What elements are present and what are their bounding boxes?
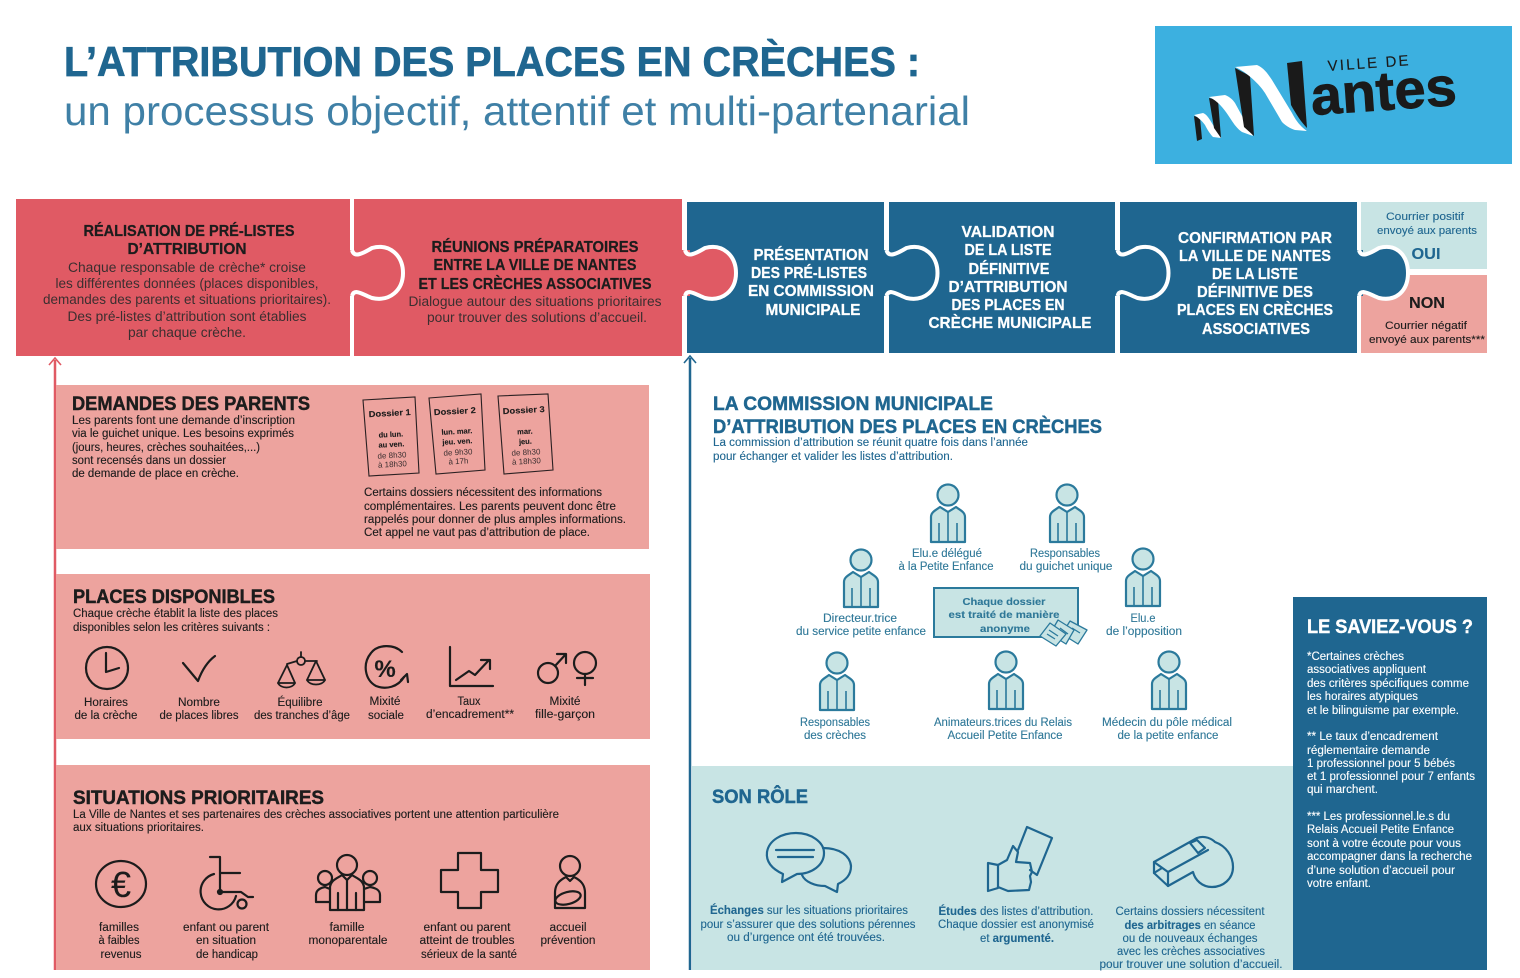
text: réalisation: les différentes données (places disponibles, — [56, 276, 318, 291]
text: footnote 3: accompagner dans la recherche — [1307, 851, 1472, 863]
text: informations complémentaires: rappelés pour donner de plus amples informations. — [364, 514, 626, 526]
heading: réalisation — [84, 221, 295, 258]
labels: critères: Nombre — [178, 697, 220, 709]
text: places disponibles — [73, 608, 278, 634]
labels: situations: famille — [330, 922, 364, 934]
panel: demandes des parents — [56, 385, 649, 549]
labels: situations: enfant ou parent — [424, 922, 511, 934]
person: médecin — [1102, 652, 1232, 742]
heading: validation: DE LA LISTE — [964, 242, 1052, 259]
labels: situations: prévention — [540, 935, 596, 947]
heading: présentation: MUNICIPALE — [766, 302, 861, 319]
callout: dossier anonyme: est traité de manière — [948, 609, 1060, 621]
labels: critères: fille-garçon — [535, 709, 595, 721]
labels: situations: atteint de troubles — [420, 935, 515, 947]
icon: medical cross — [441, 853, 498, 908]
text: échanges: Échanges sur les situations prioritaires — [710, 904, 908, 917]
person: élu opposition: Elu.e — [1130, 613, 1156, 625]
heading: validation — [928, 224, 1092, 332]
heading: confirmation: ASSOCIATIVES — [1202, 321, 1310, 338]
text: footnote 1: les horaires atypiques — [1307, 691, 1418, 703]
dossier 1: du lun. — [378, 429, 403, 440]
text: footnote 3: *** Les professionnel.le.s du — [1307, 811, 1450, 823]
person: élu délégué: Elu.e délégué — [912, 548, 982, 560]
heading: validation: D’ATTRIBUTION — [948, 279, 1068, 296]
labels: critères: de places libres — [160, 710, 239, 722]
text: réunions: pour trouver des solutions d’accueil. — [427, 310, 647, 325]
panel: oui: OUI — [1412, 246, 1440, 263]
dossier 1: au ven. — [378, 439, 405, 450]
text: informations complémentaires: complémentaires. Les parents peuvent donc être — [364, 501, 616, 513]
icon: speech bubbles — [767, 833, 851, 892]
icon: gender symbols — [538, 652, 596, 685]
labels: situations: familles — [99, 922, 139, 934]
icon: whistle — [1154, 837, 1233, 887]
heading: validation: DÉFINITIVE — [968, 259, 1050, 278]
dossier 3: Dossier 3 — [503, 404, 545, 416]
heading: places disponibles: PLACES DISPONIBLES — [73, 587, 275, 608]
dossier 2: de 9h30 — [443, 447, 473, 458]
text: réunions — [408, 294, 662, 325]
person: responsables guichet: Responsables — [1030, 548, 1100, 560]
panel: le saviez-vous — [1293, 597, 1487, 970]
dossier 1: à 18h30 — [378, 459, 408, 470]
heading: confirmation — [1177, 230, 1333, 338]
person: élu opposition: de l’opposition — [1106, 626, 1182, 638]
labels: situations: enfant ou parent — [183, 922, 270, 934]
icon: thumb up with card — [988, 827, 1052, 891]
text: footnote 2: 1 professionnel pour 5 bébés — [1307, 758, 1455, 770]
heading: présentation: PRÉSENTATION — [754, 245, 868, 264]
panel: oui: envoyé aux parents — [1377, 225, 1478, 237]
text: demandes: (jours, heures, crèches souhaitées,...) — [72, 442, 260, 454]
text: demandes: sont recensés dans un dossier — [72, 455, 226, 467]
text: footnote 2 — [1307, 731, 1475, 796]
heading: réunions: ET LES CRÈCHES ASSOCIATIVES — [418, 274, 652, 293]
text: footnote 1: *Certaines crèches — [1307, 651, 1404, 663]
heading: la commission municipale: LA COMMISSION MUNICIPALE — [713, 394, 993, 415]
labels: situations: revenus — [100, 949, 142, 961]
text: informations complémentaires: Certains dossiers nécessitent des informations — [364, 487, 602, 499]
text: études: Chaque dossier est anonymisé — [938, 919, 1094, 931]
heading: situations prioritaires: SITUATIONS PRIORITAIRES — [73, 788, 324, 809]
person: responsables crèches: Responsables — [800, 717, 870, 729]
callout: dossier anonyme: anonyme — [980, 623, 1030, 635]
icon: scales — [278, 652, 325, 688]
panel: non — [1361, 275, 1487, 353]
text: demandes: de demande de place en crèche. — [72, 468, 239, 480]
panel: non: envoyé aux parents*** — [1369, 334, 1486, 346]
panel: validation de la liste — [882, 202, 1115, 353]
labels: critères: Horaires — [84, 697, 128, 709]
text: arbitrages: pour trouver une solution d’accueil. — [1100, 959, 1282, 971]
person: responsables guichet: du guichet unique — [1020, 561, 1112, 573]
heading: validation: CRÈCHE MUNICIPALE — [928, 313, 1092, 332]
text: footnote 2: et 1 professionnel pour 7 enfants — [1307, 771, 1475, 783]
text: situations prioritaires: La Ville de Nantes et ses partenaires des crèches associatives portent une attention particulière — [73, 809, 559, 821]
person: médecin: de la petite enfance — [1118, 730, 1218, 742]
connector arrow: red — [49, 358, 61, 970]
labels: situations: accueil — [550, 922, 586, 934]
panel: réalisation de pré-listes — [16, 199, 350, 356]
panel: places disponibles — [56, 574, 650, 739]
heading: confirmation: DE LA LISTE — [1212, 266, 1298, 283]
text: échanges: ou d’urgence ont été trouvées. — [727, 932, 885, 944]
panel: son rôle — [692, 766, 1293, 971]
heading: validation: VALIDATION — [962, 224, 1054, 241]
heading: réalisation: RÉALISATION DE PRÉ-LISTES — [84, 221, 295, 240]
heading: la commission municipale — [713, 394, 1102, 438]
text: footnote 1: associatives appliquent — [1307, 664, 1427, 676]
text: demandes: Les parents font une demande d’inscription — [72, 415, 295, 427]
text: footnote 1: et le bilinguisme par exemple. — [1307, 705, 1459, 717]
labels: critères: sociale — [368, 710, 404, 722]
text: footnote 2: ** Le taux d’encadrement — [1307, 731, 1439, 743]
panel: oui — [1361, 202, 1487, 269]
heading: réunions: RÉUNIONS PRÉPARATOIRES — [432, 237, 639, 256]
heading: présentation: EN COMMISSION — [748, 283, 874, 300]
person: animateurs: Animateurs.trices du Relais — [934, 717, 1072, 729]
person: animateurs — [934, 652, 1072, 742]
text: arbitrages: ou de nouveaux échanges — [1122, 933, 1258, 945]
labels: critères — [74, 696, 595, 722]
text: réalisation: Des pré-listes d’attribution sont établies — [68, 309, 307, 324]
text: études: Études des listes d’attribution. — [938, 905, 1094, 918]
person: élu opposition — [1106, 548, 1182, 638]
icon: single-parent family — [316, 855, 380, 910]
icon: percent mixité sociale — [366, 646, 408, 688]
panel: réunions préparatoires — [346, 199, 682, 356]
dossier 3: à 18h30 — [512, 456, 542, 467]
labels: situations: sérieux de la santé — [421, 949, 517, 961]
icon: percent mixité sociale: % — [374, 656, 396, 683]
text: échanges: pour s’assurer que des solutions pérennes — [700, 919, 916, 931]
text: réalisation: demandes des parents et situations prioritaires). — [43, 292, 331, 307]
text: échanges — [700, 904, 916, 944]
text: demandes: via le guichet unique. Les besoins exprimés — [72, 428, 294, 440]
icon: check mark — [183, 656, 215, 681]
icon: documents — [1040, 620, 1087, 646]
labels: critères: d’encadrement** — [426, 709, 515, 721]
text: arbitrages — [1100, 906, 1282, 971]
heading: réunions — [418, 237, 652, 293]
heading: son rôle: SON RÔLE — [712, 786, 808, 808]
labels: situations: à faibles — [98, 935, 140, 947]
title: un processus objectif, attentif et multi-partenarial — [64, 88, 970, 134]
text: arbitrages: avec les crèches associatives — [1117, 946, 1265, 958]
icon: clock — [86, 647, 128, 689]
dossier 2: à 17h — [448, 456, 469, 466]
heading: demandes: DEMANDES DES PARENTS — [72, 394, 310, 415]
labels: situations: de handicap — [196, 949, 258, 961]
heading: réalisation: D’ATTRIBUTION — [128, 241, 246, 258]
text: footnote 2: qui marchent. — [1307, 784, 1378, 796]
title — [64, 38, 970, 134]
panel: situations prioritaires — [56, 765, 650, 970]
labels: critères: Équilibre — [278, 696, 322, 709]
heading: confirmation: CONFIRMATION PAR — [1178, 230, 1332, 247]
text: informations complémentaires — [364, 487, 626, 539]
person: animateurs: Accueil Petite Enfance — [948, 730, 1062, 742]
person: directeur — [796, 550, 926, 638]
text: réunions: Dialogue autour des situations prioritaires — [408, 294, 662, 309]
dossier 2: jeu. ven. — [441, 436, 473, 447]
text: demandes — [72, 415, 295, 480]
text: places disponibles: Chaque crèche établit la liste des places — [73, 608, 278, 620]
text: études: et argumenté. — [980, 933, 1054, 945]
labels: situations: en situation — [196, 935, 256, 947]
icon: euro — [96, 861, 146, 907]
labels: critères: Taux — [458, 696, 481, 708]
heading: présentation — [748, 245, 874, 319]
text: commission intro: pour échanger et valider les listes d’attribution. — [713, 451, 953, 463]
text: informations complémentaires: Cet appel ne vaut pas d’attribution de place. — [364, 527, 590, 539]
heading: réunions: ENTRE LA VILLE DE NANTES — [434, 257, 637, 274]
heading: confirmation: LA VILLE DE NANTES — [1179, 248, 1331, 265]
panel: non: NON — [1409, 295, 1445, 312]
person: médecin: Médecin du pôle médical — [1102, 717, 1232, 729]
text: footnote 2: réglementaire demande — [1307, 745, 1430, 757]
text: footnote 3: d’une solution d’accueil pour — [1307, 865, 1455, 877]
icon: wheelchair — [201, 857, 253, 909]
heading: le saviez-vous: LE SAVIEZ-VOUS ? — [1307, 617, 1473, 638]
dossier 2 — [429, 394, 485, 474]
panel: présentation en commission — [680, 202, 884, 353]
text: footnote 3 — [1307, 811, 1472, 890]
text: commission intro — [713, 437, 1028, 463]
labels: situations — [98, 922, 596, 961]
panel: confirmation — [1113, 202, 1357, 353]
labels: critères: des tranches d’âge — [254, 710, 350, 722]
person: directeur: Directeur.trice — [823, 613, 897, 625]
dossier 3: de 8h30 — [511, 447, 541, 458]
heading: présentation: DES PRÉ-LISTES — [751, 263, 867, 282]
text: réalisation — [43, 260, 331, 340]
dossier 3 — [498, 394, 553, 474]
icon: rising chart — [450, 647, 493, 686]
labels: critères: de la crèche — [74, 710, 138, 722]
dossier 1: de 8h30 — [377, 450, 407, 461]
heading: confirmation: DÉFINITIVE DES — [1197, 282, 1313, 301]
person: élu délégué: à la Petite Enfance — [898, 561, 994, 573]
icon: baby in arms — [554, 856, 585, 908]
text: footnote 1 — [1307, 651, 1469, 717]
callout: dossier anonyme: Chaque dossier — [962, 596, 1046, 608]
text: footnote 1: des critères spécifiques comme — [1307, 678, 1469, 690]
dossier 1 — [363, 397, 419, 476]
person: directeur: du service petite enfance — [796, 626, 926, 638]
logo: Ville de Nantes — [1155, 26, 1512, 164]
text: footnote 3: sont à votre écoute pour vous — [1307, 838, 1461, 850]
text: footnote 3: votre enfant. — [1307, 878, 1371, 890]
text: réalisation: Chaque responsable de crèche* croise — [68, 260, 306, 275]
dossier 3: mar. — [517, 427, 533, 436]
text: situations prioritaires — [73, 809, 559, 834]
title: L’ATTRIBUTION DES PLACES EN CRÈCHES : — [64, 38, 920, 85]
text: places disponibles: disponibles selon les critères suivants : — [73, 622, 270, 634]
puzzle tab: confirmation to oui/non — [1355, 247, 1408, 299]
text: commission intro: La commission d’attribution se réunit quatre fois dans l’année — [713, 437, 1028, 449]
person: responsables crèches: des crèches — [804, 730, 866, 742]
heading: validation: DES PLACES EN — [952, 297, 1064, 314]
text: réalisation: par chaque crèche. — [128, 325, 246, 340]
person: responsables crèches — [800, 652, 870, 742]
labels: critères: Mixité — [550, 696, 580, 708]
logo: Ville de Nantes: VILLE DE — [1327, 52, 1409, 75]
labels: critères: Mixité — [370, 696, 400, 708]
dossier 3: jeu. — [518, 437, 532, 446]
callout: dossier anonyme — [934, 588, 1087, 646]
dossier 2: Dossier 2 — [434, 405, 476, 417]
panel: oui: Courrier positif — [1386, 211, 1465, 223]
text: arbitrages: Certains dossiers nécessitent — [1116, 906, 1265, 918]
dossier 2: lun. mar. — [441, 426, 473, 437]
person: élu délégué — [898, 484, 994, 573]
connector arrow: blue — [684, 356, 696, 970]
text: situations prioritaires: aux situations prioritaires. — [73, 822, 204, 834]
text: études — [938, 905, 1094, 945]
text: arbitrages: des arbitrages en séance — [1124, 920, 1256, 932]
person: responsables guichet — [1020, 484, 1112, 573]
logo: Ville de Nantes: antes — [1309, 55, 1458, 127]
panel: non: Courrier négatif — [1385, 320, 1468, 332]
labels: situations: monoparentale — [308, 935, 388, 947]
text: footnote 3: Relais Accueil Petite Enfance — [1307, 824, 1454, 836]
heading: la commission municipale: D’ATTRIBUTION DES PLACES EN CRÈCHES — [713, 416, 1102, 438]
heading: confirmation: PLACES EN CRÈCHES — [1177, 300, 1333, 319]
dossier 1: Dossier 1 — [369, 407, 411, 419]
icon: euro: € — [111, 864, 131, 905]
